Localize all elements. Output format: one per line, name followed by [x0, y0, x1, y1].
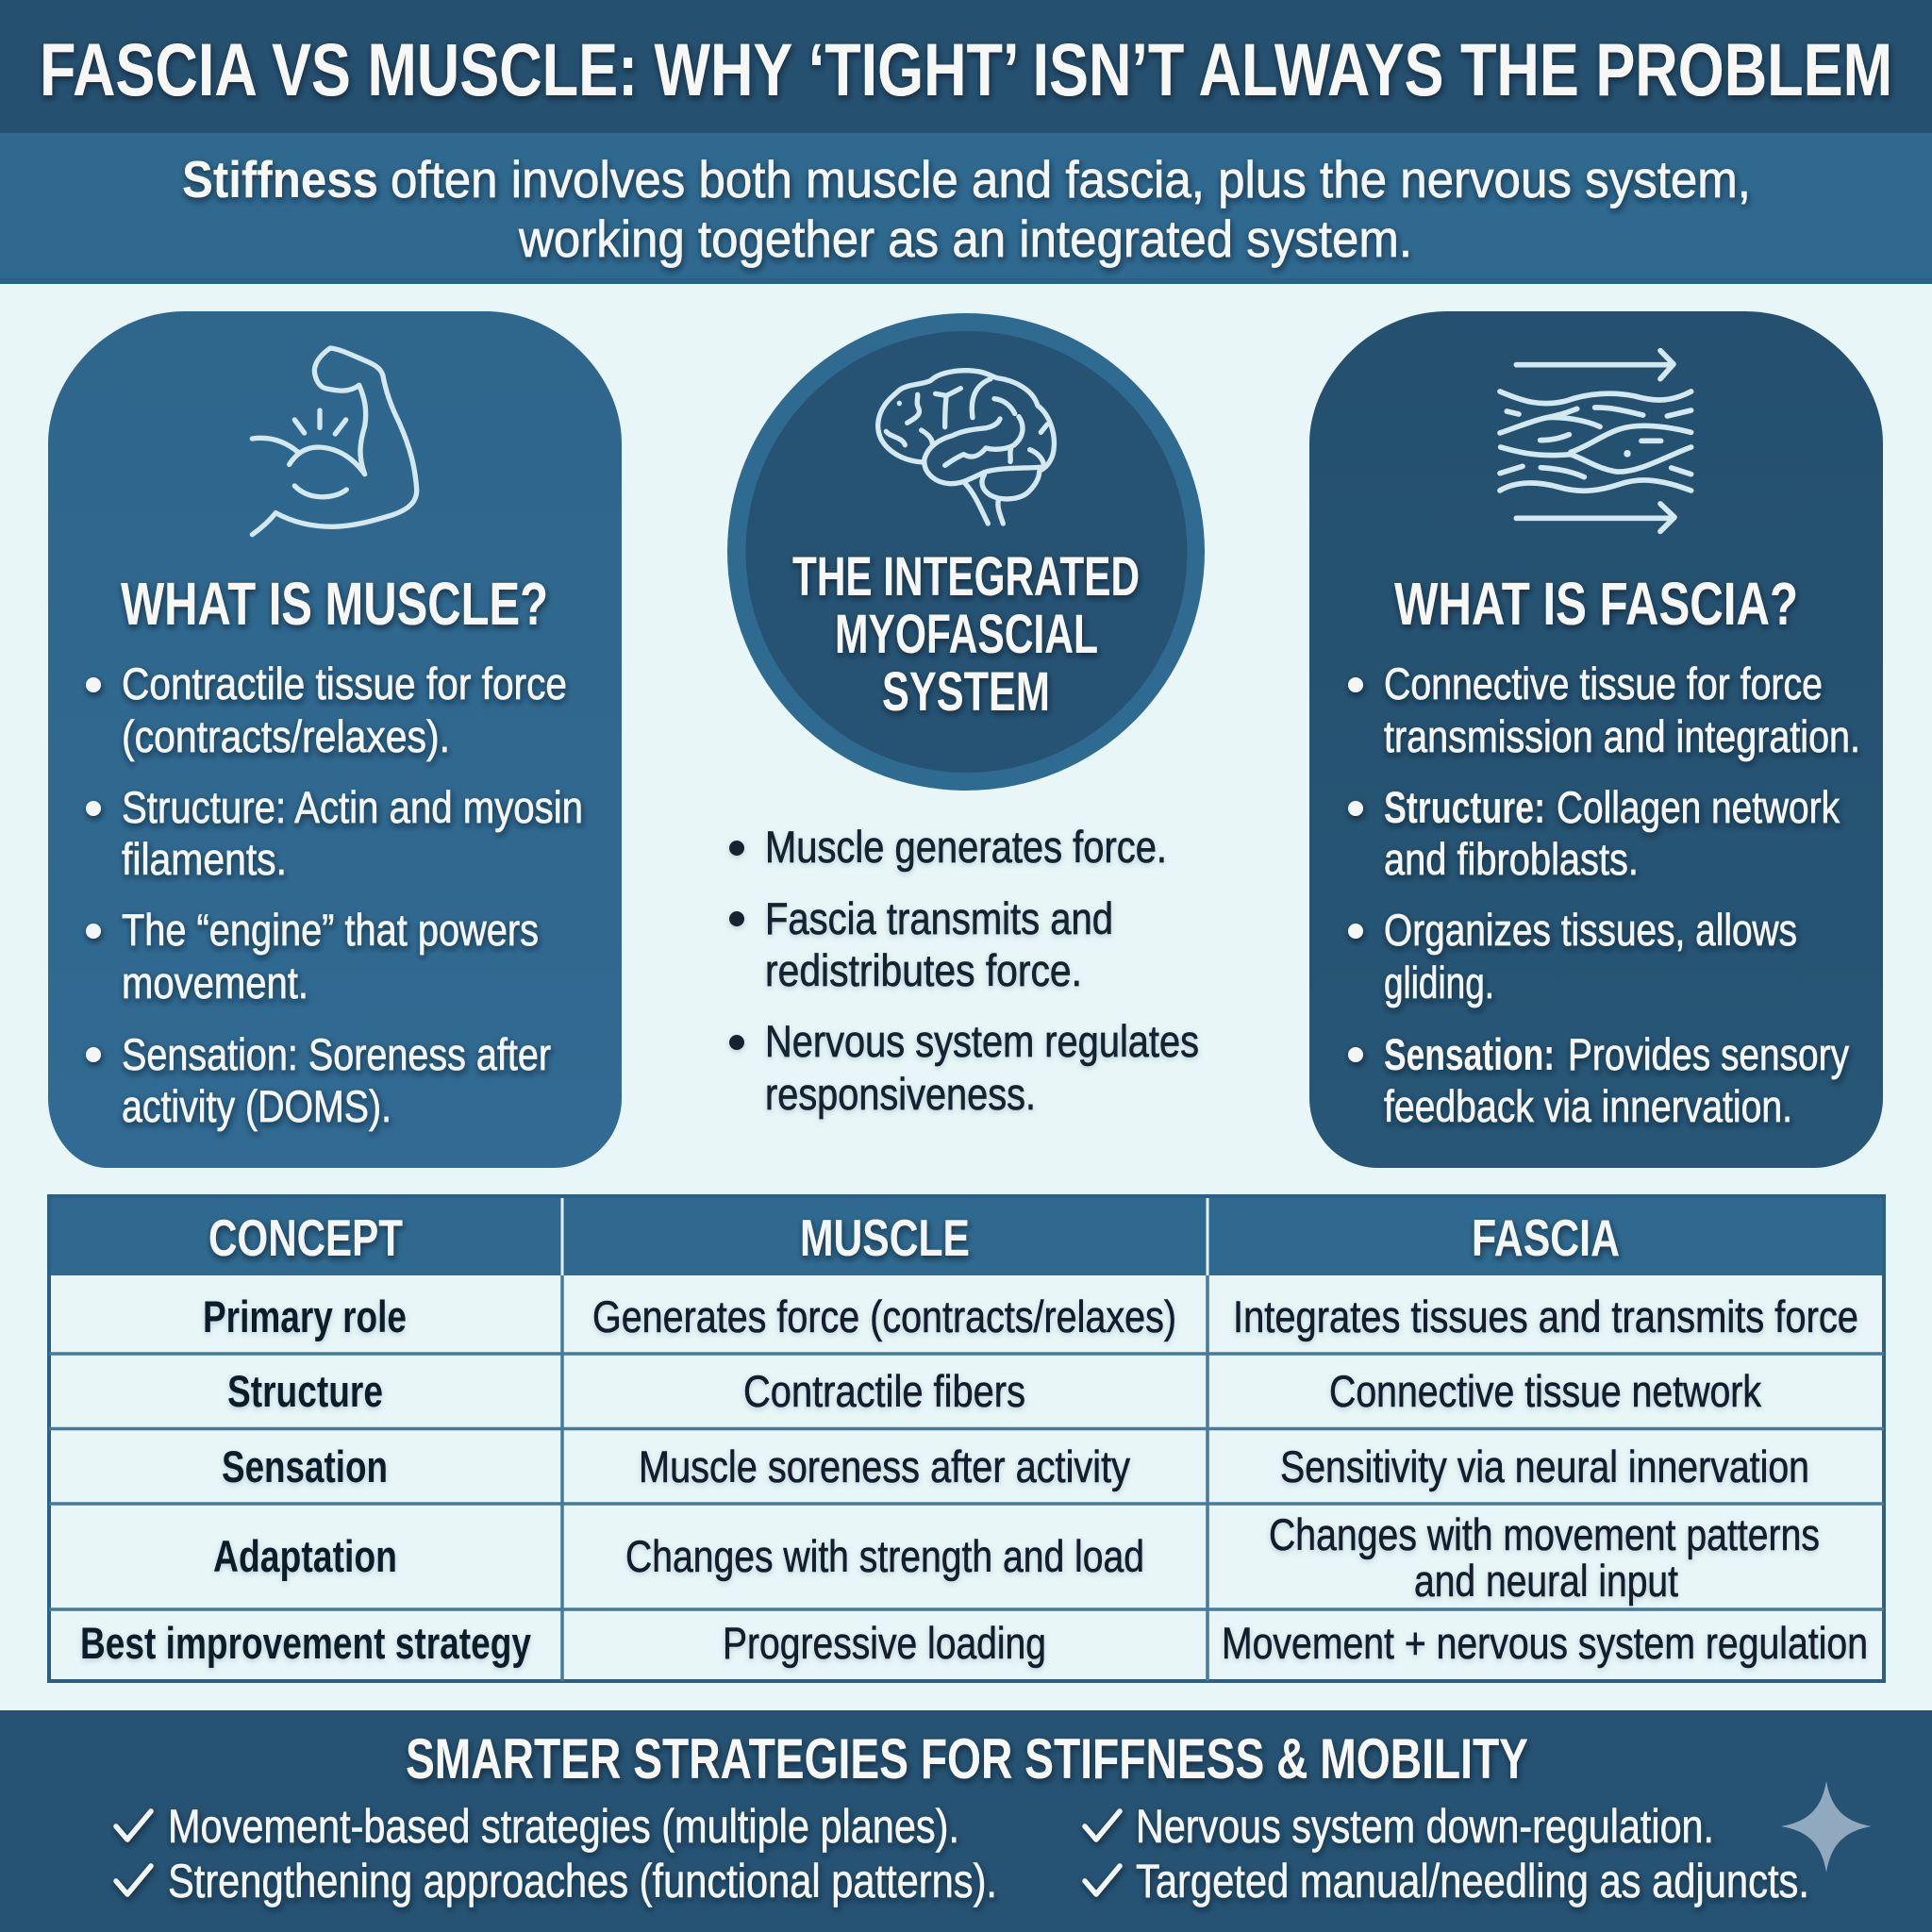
row: adaptation: Changes with movement patterns: [1269, 1509, 1820, 1559]
heading: integrated system: [792, 546, 1140, 723]
integrated system bullet list: Nervous system regulates: [765, 1016, 1199, 1066]
checklist right: Targeted manual/needling as adjuncts.: [1136, 1855, 1809, 1907]
row: adaptation: [213, 1509, 1820, 1606]
subtitle banner: Stiffness: [182, 150, 378, 208]
row: structure: Structure: [227, 1366, 383, 1416]
row: primary role: Generates force (contracts/relaxes): [592, 1291, 1176, 1341]
row: adaptation: and neural input: [1414, 1556, 1678, 1606]
subtitle banner: [0, 133, 1932, 284]
integrated system bullet list: responsiveness.: [765, 1069, 1036, 1119]
icon: fascia fibers: [1500, 351, 1691, 531]
table header row: [208, 1208, 1620, 1267]
fascia bullet list: Provides sensory: [1568, 1029, 1849, 1079]
panel: integrated myofascial system: [727, 313, 1205, 1119]
row: best improvement strategy: [80, 1618, 1868, 1668]
row: sensation: Sensation: [222, 1441, 388, 1491]
muscle bullet list: filaments.: [122, 834, 287, 884]
icon: flexed arm: [252, 348, 417, 535]
row: structure: Contractile fibers: [743, 1366, 1025, 1416]
muscle bullet list: Contractile tissue for force: [122, 658, 567, 708]
row: adaptation: Adaptation: [213, 1531, 397, 1581]
row: structure: [227, 1366, 1761, 1416]
muscle bullet list: The “engine” that powers: [122, 905, 539, 955]
row: sensation: Muscle soreness after activity: [639, 1441, 1130, 1491]
muscle bullet list: Structure: Actin and myosin: [122, 782, 583, 832]
muscle bullet list: [86, 658, 583, 1131]
checklist left: Movement-based strategies (multiple planes).: [168, 1800, 959, 1853]
fascia bullet list: Collagen network: [1557, 782, 1840, 832]
row: primary role: [203, 1291, 1858, 1341]
row: sensation: Sensitivity via neural innervation: [1280, 1441, 1809, 1491]
fascia bullet list: Structure:: [1384, 782, 1545, 832]
subtitle banner: often involves both muscle and fascia, plus the nervous system,: [391, 150, 1751, 208]
heading: what is muscle: WHAT IS MUSCLE?: [121, 570, 548, 638]
muscle bullet list: activity (DOMS).: [122, 1081, 391, 1131]
integrated system bullet list: redistributes force.: [765, 945, 1082, 995]
panel: what is fascia: [1309, 311, 1883, 1168]
fascia bullet list: and fibroblasts.: [1384, 834, 1639, 884]
icon: brain: [878, 371, 1054, 524]
fascia bullet list: [1348, 658, 1860, 1131]
icon: sparkle: [1781, 1781, 1872, 1873]
fascia bullet list: feedback via innervation.: [1384, 1081, 1792, 1131]
heading: what is fascia: WHAT IS FASCIA?: [1394, 570, 1798, 638]
footer: smarter strategies: [0, 1710, 1932, 1932]
integrated system bullet list: [729, 822, 1199, 1119]
fascia bullet list: gliding.: [1384, 958, 1494, 1008]
row: best improvement strategy: Best improvement strategy: [80, 1618, 531, 1668]
row: primary role: Primary role: [203, 1291, 407, 1341]
table grid: [49, 1196, 1884, 1681]
muscle bullet list: Sensation: Soreness after: [122, 1029, 551, 1079]
row: sensation: [222, 1441, 1809, 1491]
heading: integrated system: THE INTEGRATED: [792, 546, 1140, 608]
row: structure: Connective tissue network: [1329, 1366, 1761, 1416]
heading: integrated system: SYSTEM: [882, 661, 1050, 723]
muscle bullet list: (contracts/relaxes).: [122, 711, 450, 761]
comparison table: [49, 1196, 1884, 1681]
checklist right: Nervous system down-regulation.: [1136, 1800, 1714, 1853]
integrated system bullet list: Muscle generates force.: [765, 822, 1167, 872]
row: best improvement strategy: Progressive loading: [723, 1618, 1046, 1668]
panel: what is muscle: [48, 311, 622, 1168]
muscle bullet list: movement.: [122, 958, 308, 1008]
fascia bullet list: Connective tissue for force: [1384, 658, 1823, 708]
row: adaptation: Changes with strength and load: [625, 1531, 1144, 1581]
table header row: FASCIA: [1472, 1208, 1620, 1267]
checklist right: [1085, 1800, 1809, 1907]
title banner: [0, 0, 1932, 133]
table header row: MUSCLE: [800, 1208, 970, 1267]
checklist left: Strengthening approaches (functional patterns).: [168, 1855, 997, 1907]
heading: integrated system: MYOFASCIAL: [835, 604, 1098, 665]
checklist left: [116, 1800, 997, 1907]
subtitle banner: working together as an integrated system.: [518, 209, 1412, 268]
fascia bullet list: Sensation:: [1384, 1029, 1555, 1079]
fascia bullet list: Organizes tissues, allows: [1384, 905, 1797, 955]
table header row: CONCEPT: [208, 1208, 403, 1267]
integrated system bullet list: Fascia transmits and: [765, 893, 1113, 943]
footer heading: SMARTER STRATEGIES FOR STIFFNESS & MOBILITY: [406, 1727, 1528, 1790]
